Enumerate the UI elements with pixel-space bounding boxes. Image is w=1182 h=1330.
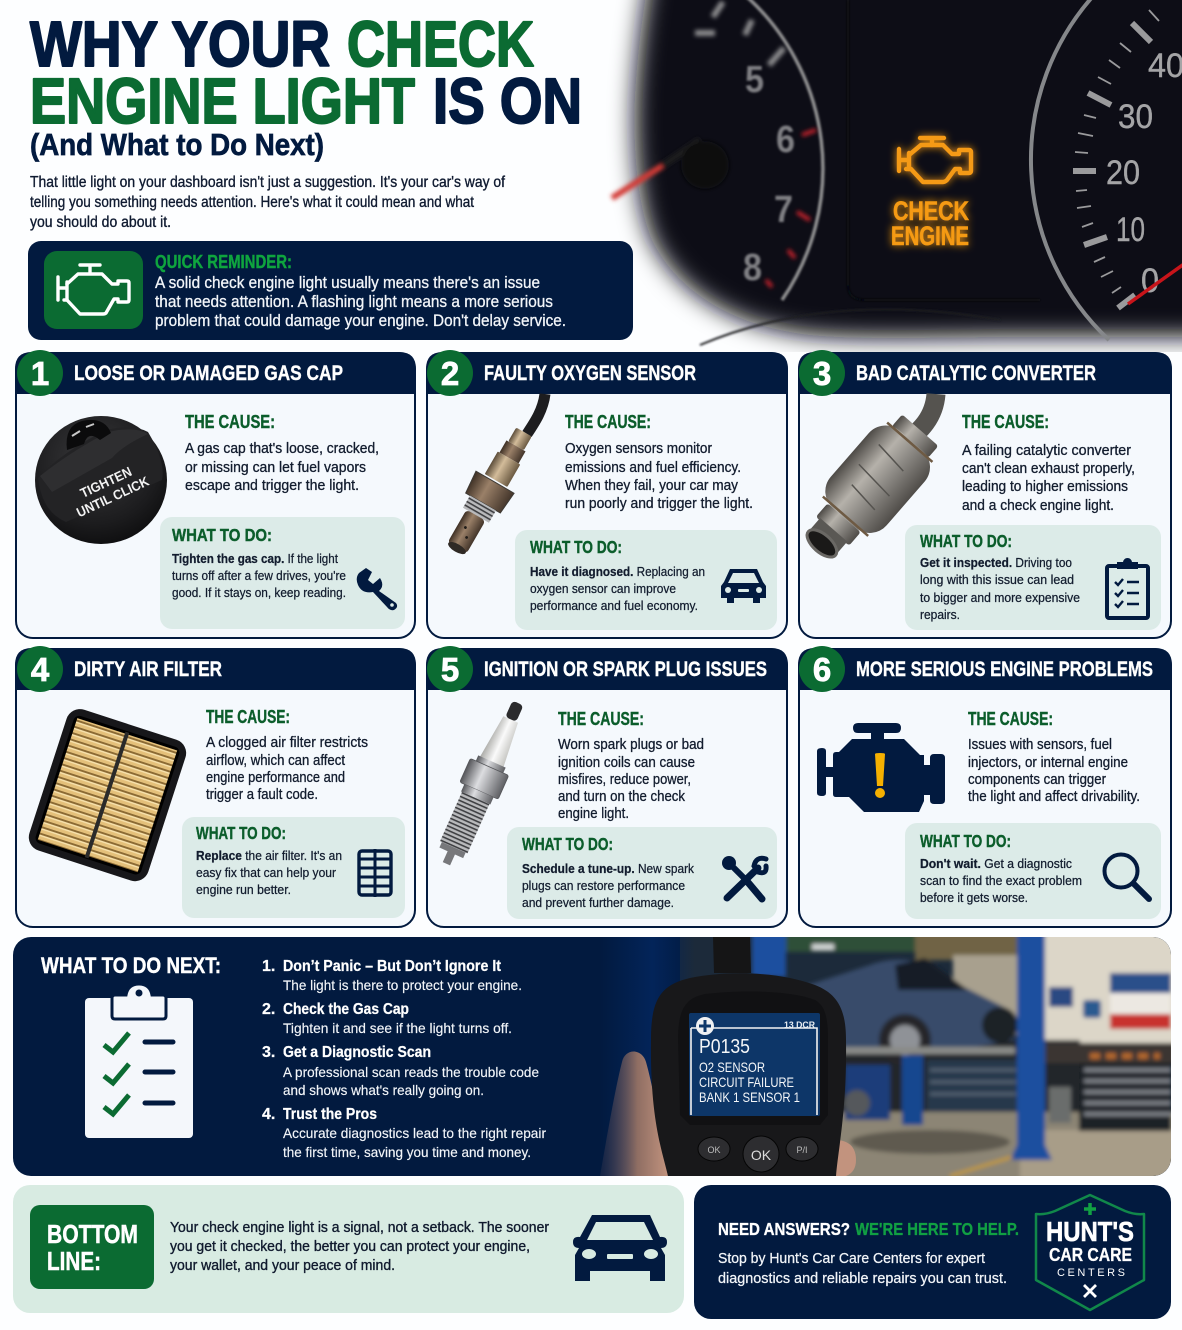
- what to do box: WHAT TO DO:: [920, 531, 1012, 551]
- panel: 4 dirty air filter: [15, 646, 416, 927]
- what to do box: performance and fuel economy.: [530, 598, 698, 613]
- panel: 3 bad catalytic converter: BAD CATALYTIC CONVERTER: [856, 362, 1096, 385]
- photo: dashboard with check engine light: [612, 0, 1182, 345]
- cause text: injectors, or internal engine: [968, 755, 1128, 771]
- bottom line text: you get it checked, the better you can protect your engine,: [170, 1239, 530, 1255]
- numbered steps: and shows what's really going on.: [283, 1082, 484, 1098]
- panel: 1 loose or damaged gas cap: LOOSE OR DAMAGED GAS CAP: [74, 362, 343, 385]
- cause text: airflow, which can affect: [206, 753, 345, 769]
- bottom line text: [170, 1220, 549, 1274]
- intro text: you should do about it.: [30, 214, 171, 231]
- panel: 3 bad catalytic converter: THE CAUSE:: [962, 412, 1049, 432]
- panel: 4 dirty air filter: DIRTY AIR FILTER: [74, 658, 222, 681]
- contact text: diagnostics and reliable repairs you can trust.: [718, 1271, 1007, 1287]
- what to do box: Don't wait. Get a diagnostic: [920, 856, 1072, 871]
- cause text: A clogged air filter restricts: [206, 735, 368, 751]
- cause text: Worn spark plugs or bad: [558, 737, 704, 753]
- logo: hunt's car care centers shield: CENTERS: [1057, 1267, 1125, 1279]
- numbered steps: 3.: [262, 1044, 275, 1061]
- icon: wrench: [357, 568, 397, 610]
- photo: dashboard with check engine light: 8: [743, 247, 762, 289]
- photo: dashboard with check engine light: 10: [1116, 211, 1145, 249]
- icon: orange check engine symbol: [899, 138, 971, 182]
- callout: quick reminder: that needs attention. A flashing light means a more serious: [155, 293, 553, 311]
- numbered steps: Tighten it and see if the light turns off.: [283, 1020, 512, 1036]
- logo: hunt's car care centers shield: CAR CARE: [1049, 1245, 1132, 1265]
- what to do box: WHAT TO DO:: [920, 831, 1011, 851]
- photo: gas cap: [35, 416, 167, 544]
- what to do box: to bigger and more expensive: [920, 590, 1080, 605]
- subtitle: (And What to Do Next): [30, 127, 324, 162]
- cause text: or missing can let fuel vapors: [185, 460, 366, 476]
- numbered steps: 4.: [262, 1106, 275, 1123]
- cause text: can't clean exhaust properly,: [962, 461, 1135, 477]
- panel: 1 loose or damaged gas cap: THE CAUSE:: [185, 412, 275, 432]
- what to do box: [160, 517, 405, 629]
- logo: hunt's car care centers shield: HUNT'S: [1046, 1216, 1134, 1247]
- callout: quick reminder: QUICK REMINDER:: [155, 252, 292, 272]
- icon: white engine outline: [58, 265, 129, 314]
- title: WHY YOUR: [30, 8, 330, 80]
- scanner device: O2 SENSOR: [699, 1059, 765, 1075]
- panel: 3 bad catalytic converter: [788, 350, 1172, 638]
- panel: 6 more serious engine problems: [798, 646, 1172, 927]
- intro text: [30, 174, 506, 231]
- panel: need answers contact: WE'RE HERE TO HELP.: [855, 1219, 1019, 1239]
- what to do box: [507, 827, 777, 919]
- scanner device: P0135: [699, 1036, 750, 1058]
- panel: 1 loose or damaged gas cap: [15, 350, 416, 638]
- photo: spark plug: [427, 694, 537, 872]
- cause text: engine performance and: [206, 770, 345, 786]
- title: ENGINE LIGHT: [30, 65, 415, 137]
- cause text: escape and trigger the light.: [185, 478, 359, 494]
- title: IS ON: [433, 65, 582, 137]
- title: CHECK: [347, 8, 534, 80]
- panel: 2 faulty oxygen sensor: THE CAUSE:: [565, 412, 651, 432]
- what to do box: Get it inspected. Driving too: [920, 555, 1072, 570]
- cause text: Oxygen sensors monitor: [565, 441, 712, 457]
- scanner device: [651, 973, 846, 1176]
- panel: need answers contact: [694, 1185, 1171, 1319]
- numbered steps: Check the Gas Cap: [283, 1001, 409, 1018]
- what to do box: [905, 525, 1161, 630]
- numbered steps: The light is there to protect your engine.: [283, 977, 522, 993]
- what to do box: plugs can restore performance: [522, 878, 685, 893]
- icon: car: [721, 569, 766, 603]
- panel: 5 ignition or spark plug issues: THE CAUSE:: [558, 709, 644, 729]
- what to do box: repairs.: [920, 607, 960, 622]
- photo: oxygen sensor: [436, 394, 545, 563]
- cause text: A failing catalytic converter: [962, 443, 1131, 459]
- label: check engine: [891, 196, 969, 251]
- scanner device: BANK 1 SENSOR 1: [699, 1089, 800, 1105]
- cause text: [185, 441, 379, 494]
- callout: quick reminder: A solid check engine light usually means there's an issue: [155, 274, 540, 292]
- what to do box: WHAT TO DO:: [522, 834, 613, 854]
- icon: engine with warning: [817, 723, 945, 812]
- scanner device: CIRCUIT FAILURE: [699, 1074, 794, 1090]
- intro text: That little light on your dashboard isn't just a suggestion. It's your car's way of: [30, 174, 506, 191]
- panel: 1 loose or damaged gas cap: 1: [31, 355, 49, 392]
- what to do box: turns off after a few drives, you're: [172, 568, 346, 583]
- panel: 5 ignition or spark plug issues: IGNITION OR SPARK PLUG ISSUES: [484, 658, 767, 681]
- numbered steps: Trust the Pros: [283, 1106, 377, 1123]
- numbered steps: 1.: [262, 958, 275, 975]
- panel: 2 faulty oxygen sensor: FAULTY OXYGEN SENSOR: [484, 362, 696, 385]
- panel: 5 ignition or spark plug issues: [426, 646, 788, 927]
- bottom line text: Your check engine light is a signal, not a setback. The sooner: [170, 1220, 549, 1236]
- cause text: leading to higher emissions: [962, 479, 1128, 495]
- what to do box: WHAT TO DO:: [196, 823, 286, 843]
- what to do box: long with this issue can lead: [920, 572, 1074, 587]
- what to do box: WHAT TO DO:: [172, 525, 272, 545]
- what to do box: easy fix that can help your: [196, 865, 337, 880]
- panel: 2 faulty oxygen sensor: [426, 350, 788, 638]
- panel: bottom line: [13, 1185, 684, 1313]
- cause text: [206, 735, 368, 803]
- contact text: [718, 1251, 1007, 1287]
- what to do box: Have it diagnosed. Replacing an: [530, 564, 705, 579]
- cause text: and a check engine light.: [962, 498, 1114, 514]
- what to do box: [905, 823, 1161, 919]
- icon: magnifying glass: [1104, 854, 1149, 899]
- cable: [713, 937, 751, 973]
- cause text: components can trigger: [968, 772, 1106, 788]
- scanner device: P/I: [796, 1145, 808, 1155]
- bottom line badge: BOTTOM: [47, 1219, 138, 1249]
- icon: filter grid: [359, 849, 391, 897]
- panel: need answers contact: NEED ANSWERS?: [718, 1219, 850, 1239]
- photo: repair shop with scanner: [600, 932, 1180, 1180]
- panel: 2 faulty oxygen sensor: 2: [441, 355, 459, 392]
- cause text: ignition coils can cause: [558, 755, 695, 771]
- photo: gas cap: UNTIL CLICK: [74, 474, 151, 520]
- cause text: [565, 441, 753, 512]
- panel: 6 more serious engine problems: 6: [813, 651, 831, 688]
- bottom line badge: [30, 1205, 154, 1289]
- what to do box: and prevent further damage.: [522, 895, 674, 910]
- cause text: misfires, reduce power,: [558, 772, 691, 788]
- cause text: When they fail, your car may: [565, 478, 739, 494]
- what to do box: Tighten the gas cap. If the light: [172, 551, 338, 566]
- what to do box: oxygen sensor can improve: [530, 581, 676, 596]
- icon: car front: [573, 1215, 667, 1281]
- cause text: emissions and fuel efficiency.: [565, 460, 741, 476]
- cause text: the light and affect drivability.: [968, 789, 1140, 805]
- icon: large clipboard with checks: [85, 984, 193, 1138]
- what to do box: Replace the air filter. It's an: [196, 848, 342, 863]
- scanner device: 13 DCR: [784, 1020, 815, 1030]
- numbered steps: [262, 958, 546, 1160]
- hand: [600, 1052, 668, 1176]
- cause text: and turn on the check: [558, 789, 686, 805]
- cause text: engine light.: [558, 806, 629, 822]
- cause text: [962, 443, 1135, 514]
- icon: crossed tools: [722, 856, 766, 899]
- what to do box: [515, 530, 777, 630]
- label: check engine: ENGINE: [891, 221, 969, 251]
- numbered steps: Get a Diagnostic Scan: [283, 1044, 431, 1061]
- panel: 3 bad catalytic converter: 3: [813, 355, 831, 392]
- what to do box: scan to find the exact problem: [920, 873, 1082, 888]
- what to do box: good. If it stays on, keep reading.: [172, 585, 346, 600]
- photo: dashboard with check engine light: 6: [776, 119, 795, 161]
- photo: dashboard with check engine light: 5: [745, 59, 764, 101]
- cause text: run poorly and trigger the light.: [565, 496, 753, 512]
- cause text: A gas cap that's loose, cracked,: [185, 441, 379, 457]
- what to do box: engine run better.: [196, 882, 291, 897]
- numbered steps: Accurate diagnostics lead to the right repair: [283, 1125, 546, 1141]
- callout: quick reminder: [28, 241, 633, 340]
- cause text: trigger a fault code.: [206, 787, 318, 803]
- contact text: Stop by Hunt's Car Care Centers for expert: [718, 1251, 985, 1267]
- numbered steps: 2.: [262, 1001, 275, 1018]
- panel: what to do next: [13, 932, 1180, 1180]
- photo: dashboard with check engine light: 0: [1141, 262, 1159, 300]
- photo: air filter: [25, 705, 190, 885]
- label: check engine: CHECK: [893, 196, 969, 226]
- photo: catalytic converter: [788, 394, 948, 574]
- bottom line text: your wallet, and your peace of mind.: [170, 1258, 395, 1274]
- what to do box: WHAT TO DO:: [530, 537, 622, 557]
- title: [30, 8, 582, 137]
- cause text: Issues with sensors, fuel: [968, 737, 1112, 753]
- photo: dashboard with check engine light: 30: [1118, 98, 1153, 136]
- cause text: [558, 737, 704, 822]
- intro text: telling you something needs attention. Here's what it could mean and what: [30, 194, 475, 211]
- panel: 6 more serious engine problems: THE CAUSE:: [968, 709, 1053, 729]
- numbered steps: A professional scan reads the trouble code: [283, 1064, 539, 1080]
- panel: what to do next: WHAT TO DO NEXT:: [41, 953, 221, 978]
- scanner device: OK: [707, 1145, 721, 1155]
- panel: 5 ignition or spark plug issues: 5: [441, 651, 459, 688]
- logo: hunt's car care centers shield: [1036, 1195, 1144, 1310]
- scanner device: OK: [751, 1147, 772, 1163]
- photo: dashboard with check engine light: 20: [1106, 154, 1140, 192]
- photo: dashboard with check engine light: 7: [774, 189, 793, 231]
- panel: 4 dirty air filter: THE CAUSE:: [206, 707, 290, 727]
- bottom line badge: LINE:: [47, 1246, 101, 1276]
- photo: gas cap: TIGHTEN: [78, 464, 134, 501]
- what to do box: [182, 817, 405, 918]
- icon: clipboard checklist: [1107, 558, 1148, 618]
- what to do box: Schedule a tune-up. New spark: [522, 861, 694, 876]
- cause text: [968, 737, 1140, 805]
- numbered steps: Don’t Panic – But Don’t Ignore It: [283, 958, 502, 975]
- numbered steps: the first time, saving you time and money.: [283, 1144, 531, 1160]
- panel: 4 dirty air filter: 4: [31, 651, 50, 688]
- callout: quick reminder: problem that could damage your engine. Don't delay service.: [155, 312, 566, 330]
- what to do box: before it gets worse.: [920, 890, 1028, 905]
